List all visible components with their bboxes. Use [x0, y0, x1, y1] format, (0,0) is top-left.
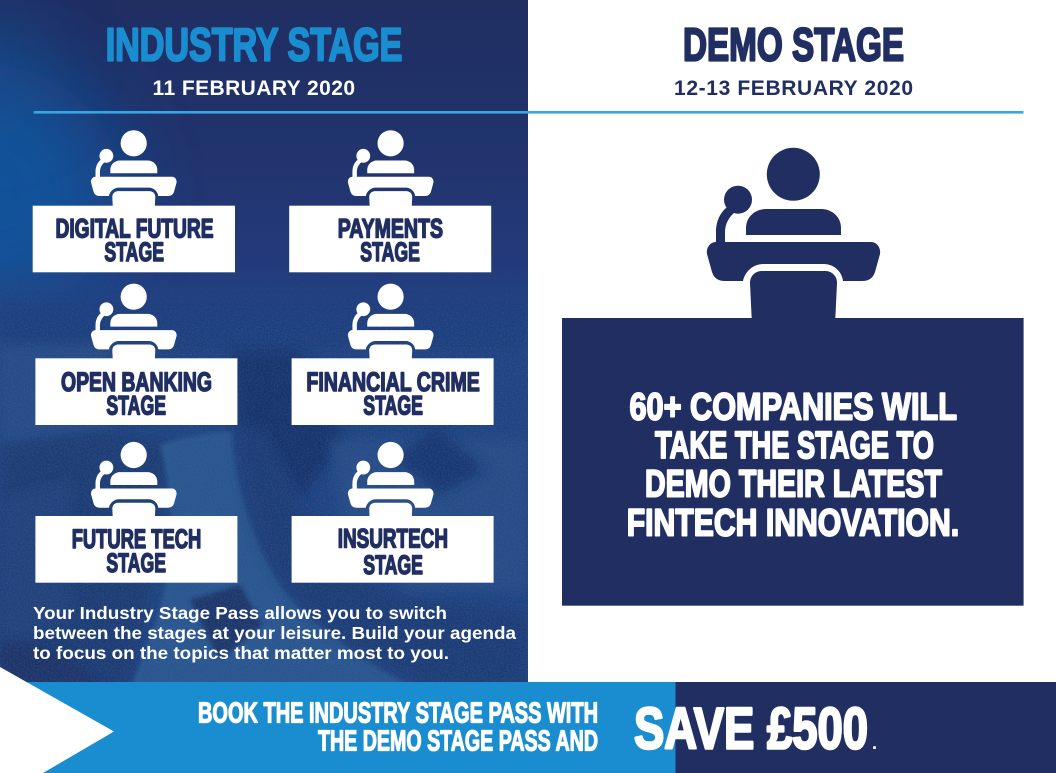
date: industry stage: 11 FEBRUARY 2020	[152, 77, 355, 100]
icon: podium speaker	[348, 284, 434, 371]
card: open banking stage	[35, 284, 237, 425]
panel: demo stage callout: TAKE THE STAGE TO	[655, 425, 934, 467]
text block: pass description: Your Industry Stage Pass allows you to switch	[33, 603, 447, 623]
panel: demo stage callout: DEMO THEIR LATEST	[645, 464, 942, 506]
date: demo stage: 12-13 FEBRUARY 2020	[674, 77, 913, 100]
icon: podium speaker	[348, 130, 434, 218]
card: open banking stage: OPEN BANKING	[61, 367, 212, 397]
card: payments stage: STAGE	[360, 237, 420, 267]
banner text: BOOK THE INDUSTRY STAGE PASS WITH	[198, 698, 598, 730]
banner: book both passes: .	[872, 733, 877, 753]
text block: pass description: to focus on the topics that matter most to you.	[33, 643, 449, 663]
icon: podium speaker	[348, 442, 434, 529]
savings amount: SAVE £500	[634, 696, 868, 762]
card: future tech stage: FUTURE TECH	[72, 524, 201, 554]
card: payments stage: PAYMENTS	[338, 214, 443, 244]
heading: industry stage: INDUSTRY STAGE	[106, 18, 402, 70]
divider line	[34, 111, 1023, 114]
card: future tech stage	[35, 442, 237, 583]
panel: demo stage callout: FINTECH INNOVATION.	[627, 502, 959, 544]
arrow notch	[0, 667, 114, 773]
card: payments stage	[289, 130, 491, 272]
icon: podium speaker	[91, 130, 177, 218]
panel: demo stage callout: 60+ COMPANIES WILL	[630, 386, 957, 428]
icon: podium speaker	[91, 284, 177, 371]
card: digital future stage	[33, 130, 235, 272]
card: financial crime stage	[292, 284, 494, 425]
icon: large podium speaker	[707, 148, 880, 325]
heading: demo stage: DEMO STAGE	[683, 18, 904, 70]
icon: podium speaker	[91, 442, 177, 529]
card: financial crime stage: FINANCIAL CRIME	[306, 367, 480, 397]
card: insurtech stage	[292, 442, 494, 583]
text block: pass description: between the stages at your leisure. Build your agenda	[33, 623, 516, 643]
card: insurtech stage: INSURTECH	[338, 523, 448, 553]
card: digital future stage: STAGE	[104, 237, 164, 267]
card: insurtech stage: STAGE	[363, 550, 423, 580]
card: future tech stage: STAGE	[106, 548, 166, 578]
panel: industry stage background	[0, 0, 528, 690]
card: digital future stage: DIGITAL FUTURE	[56, 214, 214, 244]
cityscape photo	[0, 260, 528, 690]
card: financial crime stage: STAGE	[363, 391, 423, 421]
panel: demo stage background	[528, 0, 1056, 690]
panel: demo stage callout	[562, 318, 1024, 606]
banner: book both passes	[0, 667, 1056, 773]
text block: pass description	[33, 603, 516, 663]
banner: book both passes: THE DEMO STAGE PASS AND	[318, 726, 598, 758]
card: open banking stage: STAGE	[106, 391, 166, 421]
